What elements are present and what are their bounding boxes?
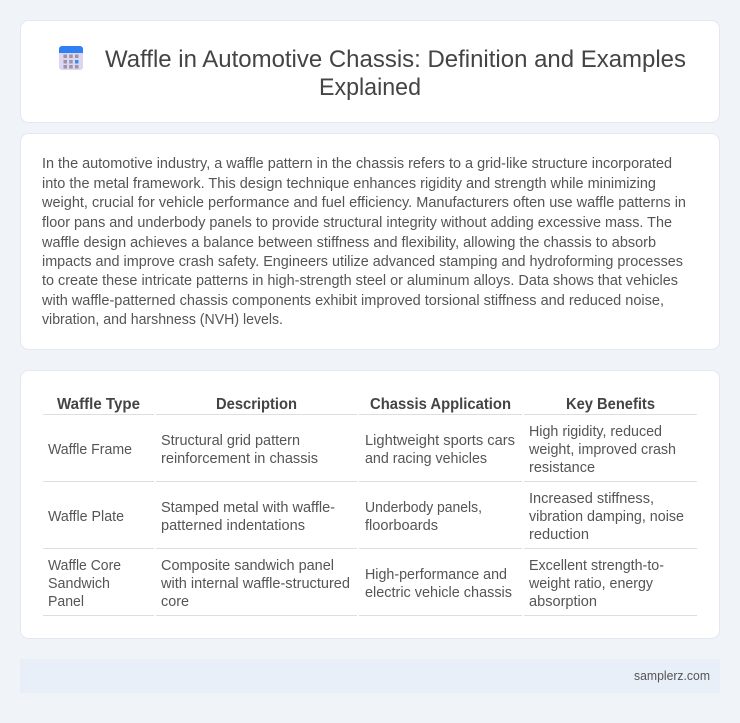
text block: description paragraph: impacts and improve crash safety. Engineers utilize advanced stamping and hydroforming processes	[42, 254, 683, 270]
text block: description paragraph: vibration, and harshness (NVH) levels.	[42, 312, 283, 328]
table row: waffle core sandwich panel: electric vehicle chassis	[365, 585, 512, 601]
title	[105, 46, 686, 101]
icon: calendar grid	[59, 46, 83, 70]
table row: waffle core sandwich panel: Sandwich	[48, 576, 110, 592]
table row: waffle core sandwich panel: Panel	[48, 594, 84, 610]
table row: waffle plate: Stamped metal with waffle-	[161, 500, 335, 516]
table header row: Chassis Application	[370, 396, 511, 413]
panel: waffle types table	[20, 370, 720, 638]
text block: description paragraph: to create these intricate patterns in high-strength steel or aluminum alloys. Data shows that vehicles	[42, 273, 678, 289]
table header row: Description	[216, 396, 297, 413]
table row: waffle frame: Waffle Frame	[48, 442, 132, 458]
title: Waffle in Automotive Chassis: Definition and Examples	[105, 46, 686, 73]
table row: waffle plate	[48, 491, 684, 543]
table row: waffle core sandwich panel: with internal waffle-structured	[160, 576, 350, 592]
panel: description	[20, 134, 720, 350]
table row: waffle frame: and racing vehicles	[365, 451, 487, 467]
text block: description paragraph: into the metal framework. This design technique enhances rigidity and strength while minimizing	[42, 176, 656, 192]
table row: waffle core sandwich panel	[48, 558, 664, 610]
text block: description paragraph: with waffle-patterned chassis components exhibit improved torsional stiffness and reduced noise,	[41, 293, 664, 309]
table row: waffle plate: Increased stiffness,	[529, 491, 654, 507]
table row: waffle plate: patterned indentations	[161, 518, 305, 534]
footer source text: samplerz.com	[634, 668, 710, 683]
table row: waffle core sandwich panel: Waffle Core	[48, 558, 121, 574]
footer bar	[20, 659, 720, 693]
table row: waffle core sandwich panel: High-performance and	[365, 567, 507, 583]
table row: waffle core sandwich panel: absorption	[529, 594, 597, 610]
table row: waffle frame	[48, 424, 676, 476]
text block: description paragraph	[41, 156, 686, 328]
text block: description paragraph: In the automotive industry, a waffle pattern in the chassis refers to a grid-like structure incorporated	[42, 156, 672, 172]
text block: description paragraph: waffle design achieves a balance between stiffness and flexibility, allowing the chassis to absorb	[41, 235, 656, 251]
title: Explained	[319, 74, 421, 101]
table row: waffle frame: reinforcement in chassis	[161, 451, 318, 467]
table row: waffle frame: High rigidity, reduced	[529, 424, 662, 440]
table row: waffle core sandwich panel: weight ratio, energy	[528, 576, 654, 592]
table row: waffle frame: resistance	[529, 460, 595, 476]
table row: waffle core sandwich panel: core	[161, 594, 189, 610]
table row: waffle frame: Structural grid pattern	[161, 433, 300, 449]
table row: waffle frame: Lightweight sports cars	[365, 433, 515, 449]
table header row: Key Benefits	[566, 396, 655, 413]
table row: waffle plate: reduction	[529, 527, 589, 543]
table row: waffle plate: vibration damping, noise	[529, 509, 684, 525]
table header row: Waffle Type	[57, 396, 140, 413]
table row: waffle core sandwich panel: Composite sandwich panel	[161, 558, 334, 574]
table row: waffle core sandwich panel: Excellent strength-to-	[529, 558, 664, 574]
table header row	[57, 396, 655, 413]
table row: waffle plate: floorboards	[365, 518, 438, 534]
table row: waffle plate: Waffle Plate	[48, 509, 124, 525]
table row: waffle plate: Underbody panels,	[365, 500, 482, 516]
table row: waffle frame: weight, improved crash	[528, 442, 676, 458]
text block: description paragraph: floor pans and underbody panels to provide structural integrity without adding excessive mass. The	[42, 215, 672, 231]
panel: header	[20, 20, 720, 122]
text block: description paragraph: weight, crucial for vehicle performance and fuel efficiency. Manufacturers often use waffle patterns in	[41, 195, 686, 211]
